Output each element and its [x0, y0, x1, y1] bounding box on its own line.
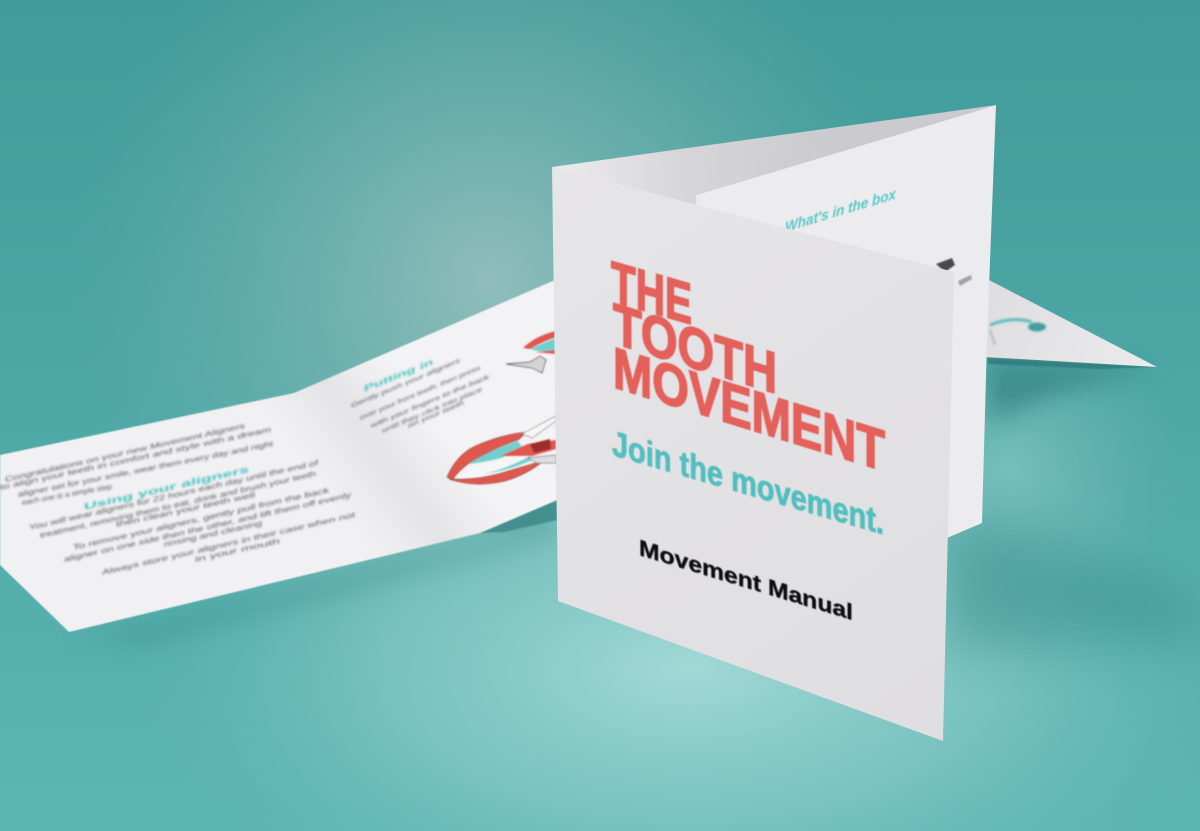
text block: welcome and using your aligners (blurred): aligner on one side then the other, and lift them off evenly — [64, 490, 351, 564]
title: The Tooth Movement: MOVEMENT — [613, 334, 885, 484]
text block: putting in (blurred): with your fingers to the back — [370, 373, 490, 431]
title: The Tooth Movement: THE — [611, 248, 692, 337]
panel: front cover of the manual — [552, 167, 954, 741]
text block: welcome and using your aligners (blurred): Congratulations on your new Movement Aligners — [5, 421, 245, 484]
text block: welcome and using your aligners (blurred): Always store your aligners in their case when not — [102, 510, 356, 577]
text block: putting in (blurred): over your front teeth, then press — [360, 364, 481, 422]
panel: back wing behind the card — [985, 278, 1157, 367]
upper lip — [447, 432, 527, 480]
text block: welcome and using your aligners (blurred): then clean your teeth well — [116, 490, 255, 529]
icon: upper teeth and hand illustration — [506, 331, 556, 373]
text block: welcome and using your aligners (blurred): to align your teeth in comfort and style with a dream — [0, 425, 271, 492]
teal teeth upper — [468, 441, 522, 464]
title: The Tooth Movement: TOOTH — [613, 290, 777, 407]
panel: shaded inside of fold — [552, 105, 996, 210]
text block: putting in (blurred): until they click into place — [382, 386, 482, 435]
panel: inner right page of standing card — [552, 105, 996, 600]
text block: welcome and using your aligners (blurred): You will wear aligners for 22 hours each day until the end of — [29, 458, 319, 532]
tagline: Join the movement: Join the movement. — [612, 424, 884, 543]
text block: welcome and using your aligners (blurred) — [0, 421, 356, 577]
lower lip — [449, 461, 543, 484]
red bar of aligner tool — [500, 440, 556, 456]
text block: welcome and using your aligners (blurred): aligner set for your smile, wear them every day and night — [18, 439, 274, 499]
text block: putting in (blurred): Gently push your aligners — [351, 357, 461, 410]
panel: open left pages of the manual — [0, 280, 557, 632]
text block: welcome and using your aligners (blurred): treatment, removing them to eat, drink and brush your teeth — [40, 469, 316, 540]
text block: putting in (blurred): on your teeth — [408, 400, 464, 430]
cast shadows on the surface — [70, 358, 1200, 650]
heading: what's in the box: What's in the box — [785, 186, 897, 236]
text block: welcome and using your aligners (blurred): rinsing and cleaning — [164, 519, 262, 549]
subtitle: Movement Manual: Movement Manual — [639, 535, 853, 625]
text block: welcome and using your aligners (blurred): in your mouth — [195, 536, 280, 564]
white tool arms — [522, 416, 556, 438]
text block: welcome and using your aligners (blurred): To remove your aligners, gently pull from the back — [73, 485, 329, 552]
white gap — [456, 456, 530, 478]
teal teeth lower — [484, 456, 532, 474]
icon: blurred smudge behind the fold — [936, 258, 972, 286]
text block: putting in (blurred) — [351, 357, 490, 435]
icon: open mouth with aligner illustration — [447, 416, 556, 484]
text block: putting in (blurred): Putting in — [364, 357, 433, 394]
text block: welcome and using your aligners (blurred): Using your aligners — [84, 464, 249, 513]
text block: welcome and using your aligners (blurred): each one is a simple step — [22, 482, 112, 507]
icon: blurred toothbrush on wing — [990, 320, 1046, 345]
title: The Tooth Movement — [611, 248, 885, 484]
